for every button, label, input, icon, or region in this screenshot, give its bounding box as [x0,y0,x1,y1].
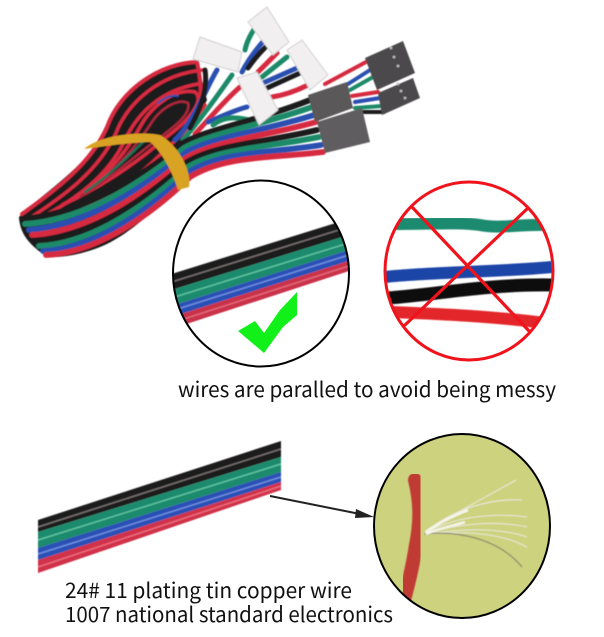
circle outline [374,434,550,618]
caption: wire specification: 1007 national standard electronics [65,599,393,629]
black connector A [308,82,353,122]
upper cable loops [19,61,207,257]
yellow rubber band [84,134,189,190]
black connector B [317,108,370,153]
circle outline [385,182,553,360]
caption: parallel wires: wires are paralled to avoid being messy [178,374,556,404]
circled flat wire band [174,222,348,324]
white connector 4 [237,72,278,125]
black connector C [365,41,415,90]
connector pin holes [390,47,406,99]
photo: coiled 4-colour cable with connectors [19,7,420,257]
white connector 1 [193,37,242,72]
circle outline [173,180,349,366]
panel: messy wires circle (wrong) [385,182,553,360]
wire fan to white connectors [175,25,308,140]
caption: wire specification: 24# 11 plating tin copper wire [65,575,352,605]
white connector 3 [287,40,328,90]
icon: green check mark [238,292,297,353]
icon: red cross [405,207,530,332]
lower flat cable band [22,100,323,255]
black connector D [378,78,420,115]
wires to rear black connectors [325,62,384,112]
panel: stripped tin-plated wire close-up [374,434,550,618]
red wire [404,480,419,600]
loose wires [385,223,552,323]
panel: parallel wires circle (correct) [165,180,355,366]
arrow: band to wire close-up [270,496,374,518]
photo: flat 4-colour wire band [38,441,281,573]
white connector 2 [248,7,289,55]
caption: wire specification [65,575,393,629]
tinned copper strands [424,480,527,567]
yellow-green background [374,434,550,618]
